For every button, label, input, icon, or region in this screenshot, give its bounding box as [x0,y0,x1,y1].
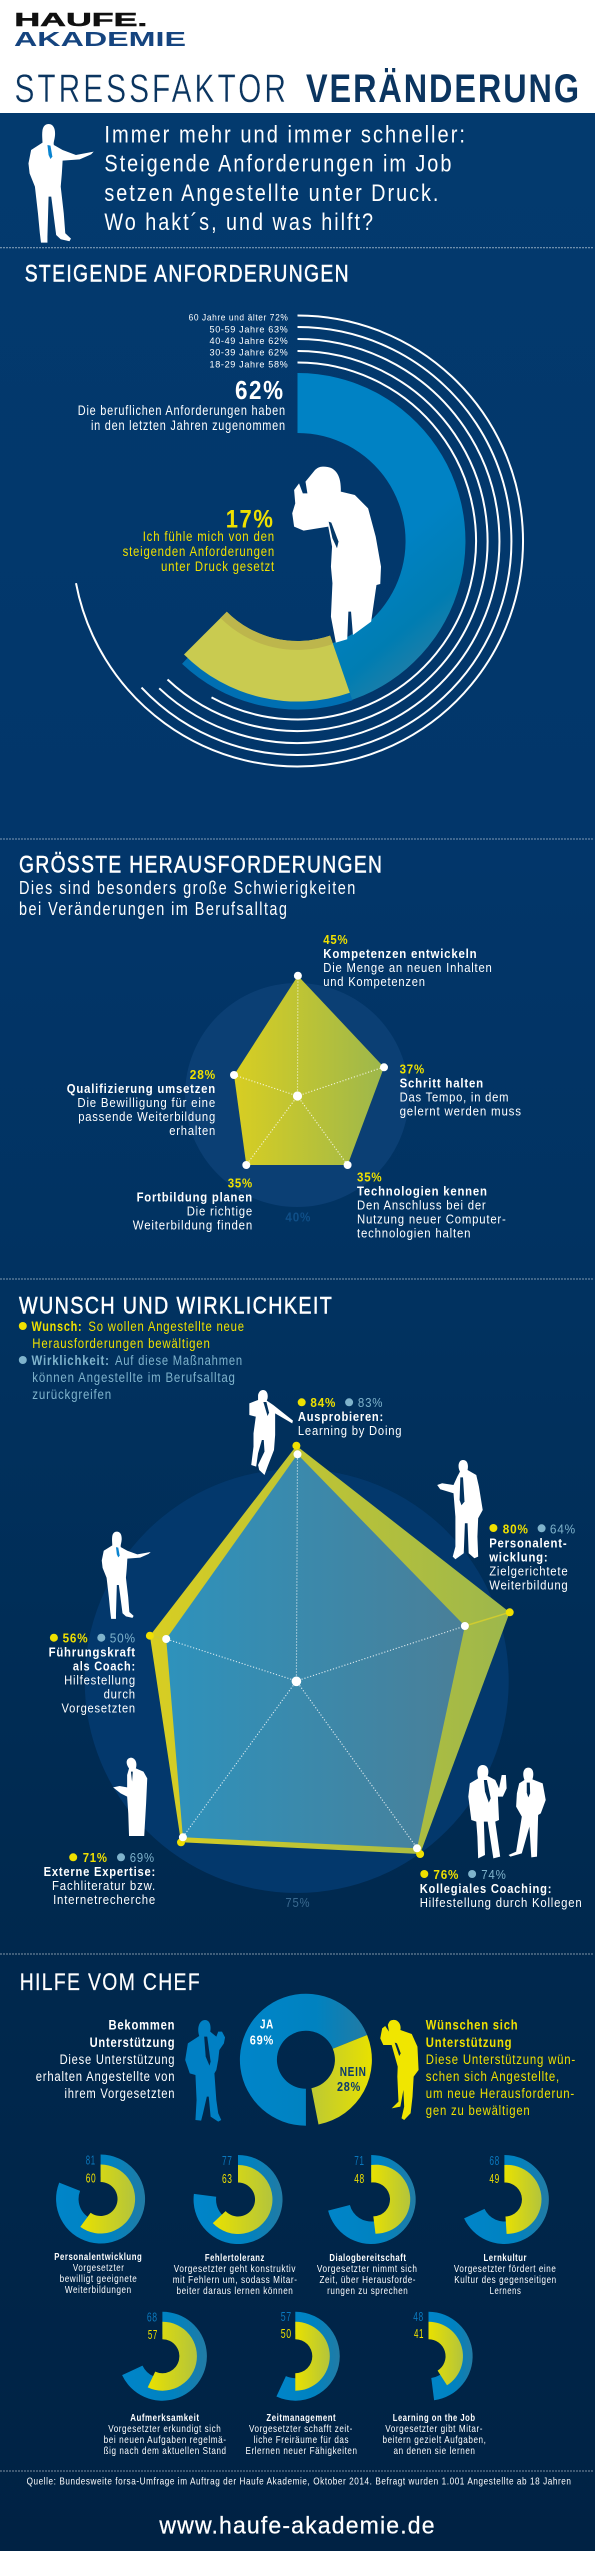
caption: Learning on the Job: an denen sie lernen [394,2446,476,2457]
donut: Fehlertoleranz: 77 [222,2154,232,2168]
age group labels: 30-39 Jahre 62% [210,348,288,359]
label: Schritt halten: Das Tempo, in dem [400,1091,509,1105]
label: Externe Expertise: 71% [83,1851,108,1865]
caption: Personalentwicklung: bewilligt geeignete [60,2274,137,2285]
donut: Dialogbereitschaft [328,2154,416,2244]
caption: Aufmerksamkeit: Aufmerksamkeit [130,2413,200,2424]
caption: Personalentwicklung: Personalentwicklung [54,2252,142,2263]
chart: support donut: JA [260,2017,274,2032]
icon: jumping man [249,1390,293,1475]
heading: Steigende Anforderungen: STEIGENDE ANFORDERUNGEN [25,261,350,288]
caption: Lernkultur: Lernkultur [484,2253,527,2264]
legend: Herausforderungen bewältigen [32,1336,211,1351]
17 percent callout: steigenden Anforderungen [123,543,275,559]
age group labels: 60 Jahre und älter 72% [189,313,288,324]
donut: Personalentwicklung: 81 [86,2153,96,2167]
caption: Dialogbereitschaft [317,2253,418,2297]
text: Bekommen Unterstuetzung: erhalten Angestellte von [36,2069,175,2084]
label: Kompetenzen entwickeln: und Kompetenzen [323,975,426,989]
icon: presenting man [28,124,94,243]
caption: Fehlertoleranz: mit Fehlern um, sodass Mitar- [173,2275,298,2286]
intro text [104,121,467,236]
icon: yellow man [380,2020,419,2120]
label: Technologien kennen: 35% [357,1171,382,1185]
label: Qualifizierung umsetzen: erhalten [169,1124,216,1138]
donut: Zeitmanagement: 50 [281,2327,292,2341]
text: Bekommen Unterstuetzung: Diese Unterstützung [60,2052,175,2067]
label: Personalentwicklung [488,1522,576,1593]
heading: Wunsch und Wirklichkeit: WUNSCH UND WIRKLICHKEIT [19,1292,333,1319]
legend: So wollen Angestellte neue [88,1319,245,1334]
17 percent callout [123,505,275,574]
age group labels: 40-49 Jahre 62% [210,336,288,347]
age group labels: 50-59 Jahre 63% [210,325,288,336]
label: Qualifizierung umsetzen [67,1068,216,1138]
donut: Fehlertoleranz [194,2154,283,2244]
scale label 40 percent: 40% [285,1211,311,1225]
text: Wuenschen sich Unterstuetzung: Wünschen sich [426,2018,518,2033]
17 percent callout: 17% [226,505,274,533]
text: Bekommen Unterstuetzung [36,2018,175,2101]
caption: Fehlertoleranz: beiter daraus lernen können [176,2286,293,2297]
heading: Hilfe vom Chef: HILFE VOM CHEF [20,1969,201,1996]
caption: Dialogbereitschaft: Vorgesetzter nimmt sich [317,2264,418,2275]
chart: age group rings [76,316,523,766]
label: Kompetenzen entwickeln: 45% [323,933,348,947]
icon: blue man [185,2020,225,2122]
label: Kollegiales Coaching: Kollegiales Coaching: [420,1882,552,1896]
donut: Learning on the Job: 41 [414,2327,424,2341]
label: Externe Expertise: Internetrecherche [53,1893,156,1907]
label: Ausprobieren: Ausprobieren: [298,1410,384,1424]
text: Wuenschen sich Unterstuetzung [426,2018,576,2118]
scale label 75 percent: 75% [285,1896,310,1910]
intro text: setzen Angestellte unter Druck. [104,180,440,207]
caption: Fehlertoleranz [173,2253,298,2297]
donut: Lernkultur: 49 [489,2172,500,2186]
donut: Fehlertoleranz: 63 [222,2172,232,2186]
text: Bekommen Unterstuetzung: Unterstützung [90,2035,175,2050]
label: Fortbildung planen: Fortbildung planen [137,1191,253,1205]
label: Kollegiales Coaching: 74% [481,1868,507,1882]
icon: pointing man [437,1460,483,1559]
caption: Lernkultur: Kultur des gegenseitigen [454,2275,557,2286]
label: Personalentwicklung: 80% [503,1522,529,1536]
label: Kollegiales Coaching [420,1868,582,1910]
label: Schritt halten [400,1063,522,1119]
label: Qualifizierung umsetzen: Die Bewilligung für eine [77,1096,216,1110]
chart: support donut: NEIN [340,2064,367,2079]
icon: presenting man small [102,1532,151,1619]
icon: stressed man [292,467,381,643]
17 percent callout: Ich fühle mich von den [143,528,275,544]
caption: Learning on the Job: Learning on the Job [393,2413,476,2424]
donut: Lernkultur: 68 [489,2154,500,2168]
caption: Zeitmanagement: liche Freiräume für das [254,2435,349,2446]
text: Bekommen Unterstuetzung: Bekommen [108,2018,175,2033]
age group labels [189,313,288,371]
label: Externe Expertise [44,1851,156,1907]
caption: Fehlertoleranz: Vorgesetzter geht konstruktiv [174,2264,296,2275]
caption: Zeitmanagement: Vorgesetzter schafft zeit- [249,2424,353,2435]
legend: können Angestellte im Berufsalltag [32,1370,236,1385]
title: STRESSFAKTOR [14,67,289,111]
text: Bekommen Unterstuetzung: ihrem Vorgesetzten [64,2086,175,2101]
chart: 62 percent blue ring [182,373,465,709]
donut: Personalentwicklung [56,2153,145,2244]
label: Fuehrungskraft als Coach: 50% [110,1632,136,1646]
caption: Learning on the Job: beitern gezielt Aufgaben, [382,2435,486,2446]
legend: Wunsch: [32,1319,82,1334]
caption: Personalentwicklung [54,2252,142,2296]
label: Fuehrungskraft als Coach: durch [104,1688,136,1702]
white header background [0,0,595,114]
label: Fortbildung planen: Die richtige [187,1205,253,1219]
donut: Zeitmanagement: 57 [281,2310,292,2324]
label: Personalentwicklung: 64% [550,1522,576,1536]
caption: Dialogbereitschaft: Dialogbereitschaft [329,2253,406,2264]
caption: Learning on the Job [382,2413,486,2457]
caption: Lernkultur: Lernens [490,2286,521,2297]
label: Fuehrungskraft als Coach: Hilfestellung [64,1674,136,1688]
chart: 17 percent yellow segment [184,612,350,702]
age group labels: 18-29 Jahre 58% [210,360,288,371]
caption: Zeitmanagement [246,2413,358,2457]
label: Externe Expertise: Externe Expertise: [44,1865,156,1879]
caption: Learning on the Job: Vorgesetzter gibt Mitar- [385,2424,483,2435]
donut: Learning on the Job [413,2310,473,2400]
label: Personalentwicklung: Weiterbildung [489,1579,568,1593]
label: Ausprobieren: 83% [358,1396,383,1410]
62 percent callout: Die beruflichen Anforderungen haben [78,402,286,418]
caption: Aufmerksamkeit: ßig nach dem aktuellen Stand [104,2446,227,2457]
label: Schritt halten: 37% [400,1063,425,1077]
icon: two colleagues [468,1765,546,1858]
label: Kompetenzen entwickeln: Kompetenzen entwickeln [323,947,477,961]
text: Wuenschen sich Unterstuetzung: Unterstützung [426,2035,512,2050]
label: Technologien kennen: Nutzung neuer Computer- [357,1213,507,1227]
logo: Haufe Akademie: AKADEMIE [14,29,186,51]
chart: challenges radar [185,972,409,1207]
chart: support donut: 28% [337,2079,361,2094]
donut: Learning on the Job: 48 [413,2310,424,2324]
icon: reading man [113,1758,147,1836]
label: Ausprobieren: 84% [310,1396,336,1410]
label: Kollegiales Coaching: Hilfestellung durch Kollegen [420,1896,582,1910]
website url: www.haufe-akademie.de [158,2512,436,2539]
donut: Aufmerksamkeit: 57 [148,2328,158,2342]
legend: Wirklichkeit: [32,1353,110,1368]
caption: Aufmerksamkeit: bei neuen Aufgaben regelmä- [104,2435,227,2446]
label: Fuehrungskraft als Coach [49,1632,136,1716]
heading: Groesste Herausforderungen: GRÖSSTE HERAUSFORDERUNGEN [19,851,383,878]
caption: Dialogbereitschaft: rungen zu sprechen [327,2286,408,2297]
caption: Aufmerksamkeit [104,2413,227,2457]
logo: Haufe Akademie: HAUFE. [14,9,147,30]
17 percent callout: unter Druck gesetzt [161,558,275,574]
label: Fortbildung planen [133,1177,253,1233]
intro text: Steigende Anforderungen im Job [104,151,453,178]
caption: Dialogbereitschaft: Zeit, über Herausforde- [320,2275,416,2286]
caption: Zeitmanagement: Erlernen neuer Fähigkeiten [246,2446,358,2457]
caption: Zeitmanagement: Zeitmanagement [266,2413,336,2424]
chart: wish and reality radar [85,1442,514,1893]
heading: Groesste Herausforderungen: bei Veränderungen im Berufsalltag [19,899,288,919]
donut: Dialogbereitschaft: 71 [354,2154,365,2168]
legend [19,1319,245,1402]
label: Fuehrungskraft als Coach: Vorgesetzten [62,1702,136,1716]
label: Externe Expertise: 69% [130,1851,155,1865]
donut: Lernkultur [464,2154,549,2244]
donut: Aufmerksamkeit: 68 [147,2311,158,2325]
caption: Lernkultur: Vorgesetzter fördert eine [454,2264,556,2275]
label: Personalentwicklung: Zielgerichtete [489,1565,568,1579]
label: Ausprobieren: Learning by Doing [298,1424,402,1438]
62 percent callout: in den letzten Jahren zugenommen [91,417,286,433]
label: Schritt halten: Schritt halten [400,1077,484,1091]
label: Fuehrungskraft als Coach: als Coach: [73,1660,136,1674]
label: Qualifizierung umsetzen: passende Weiterbildung [78,1110,216,1124]
label: Qualifizierung umsetzen: Qualifizierung umsetzen [67,1082,216,1096]
text: Wuenschen sich Unterstuetzung: gen zu bewältigen [426,2103,530,2118]
title [14,67,581,111]
intro text: Wo hakt´s, und was hilft? [104,209,375,236]
label: Fortbildung planen: 35% [228,1177,253,1191]
label: Technologien kennen: technologien halten [357,1227,471,1241]
text: Wuenschen sich Unterstuetzung: schen sich Angestellte, [426,2069,560,2084]
label: Technologien kennen: Den Anschluss bei der [357,1199,486,1213]
intro text: Immer mehr und immer schneller: [104,121,467,148]
caption: Personalentwicklung: Vorgesetzter [73,2263,124,2274]
label: Externe Expertise: Fachliteratur bzw. [52,1879,156,1893]
chart: support donut [240,1994,372,2126]
label: Kompetenzen entwickeln [323,933,493,989]
label: Technologien kennen: Technologien kennen [357,1185,488,1199]
label: Qualifizierung umsetzen: 28% [190,1068,216,1082]
caption: Personalentwicklung: Weiterbildungen [65,2285,132,2296]
label: Kompetenzen entwickeln: Die Menge an neuen Inhalten [323,961,493,975]
label: Kollegiales Coaching: 76% [433,1868,459,1882]
label: Schritt halten: gelernt werden muss [400,1105,522,1119]
caption: Aufmerksamkeit: Vorgesetzter erkundigt sich [108,2424,221,2435]
heading: Groesste Herausforderungen [19,851,383,919]
logo: Haufe Akademie [14,9,186,51]
chart: support donut: 69% [250,2032,274,2047]
donut: Aufmerksamkeit [122,2311,207,2401]
label: Fuehrungskraft als Coach: Führungskraft [49,1646,136,1660]
label: Fuehrungskraft als Coach: 56% [63,1632,88,1646]
legend: zurückgreifen [32,1387,112,1402]
legend: Auf diese Maßnahmen [115,1353,243,1368]
label: Ausprobieren [298,1396,402,1438]
label: Personalentwicklung: Personalent- [489,1537,567,1551]
donut: Dialogbereitschaft: 48 [354,2172,365,2186]
donut: Zeitmanagement [276,2310,340,2401]
label: Fortbildung planen: Weiterbildung finden [133,1219,253,1233]
62 percent callout [78,375,286,433]
caption: Lernkultur [454,2253,557,2297]
donut: Personalentwicklung: 60 [86,2171,96,2185]
heading: Groesste Herausforderungen: Dies sind besonders große Schwierigkeiten [19,878,357,898]
label: Technologien kennen [357,1171,507,1241]
label: Personalentwicklung: wicklung: [488,1551,548,1565]
62 percent callout: 62% [235,375,285,405]
caption: Fehlertoleranz: Fehlertoleranz [205,2253,265,2264]
